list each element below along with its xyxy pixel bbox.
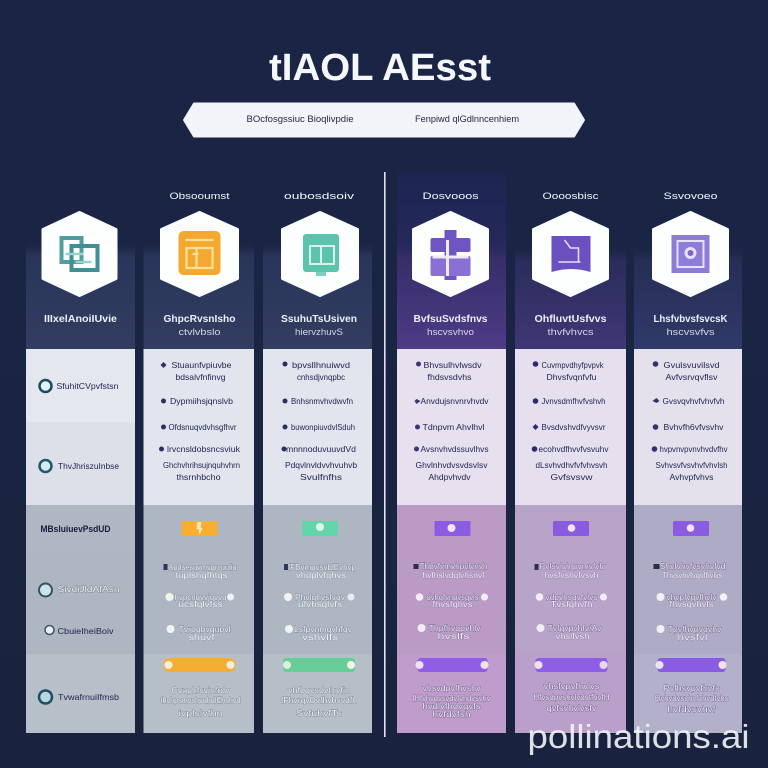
column 5 header band [515,172,626,349]
column 2 header sublabel: ctvlvbslo [178,327,220,337]
icon: purple document [552,236,590,272]
column 3 note: fFhvrqvDvfhvbsvdfh [281,695,357,705]
column 1 upper panel [26,349,135,422]
column 5 feature list [532,360,609,482]
column 5: violet [515,172,626,733]
column 6 grey panel upper [634,505,742,654]
column 2 lower list: ucsfqlvfss [178,599,222,609]
column 6 feature list: Bvhvfh6vfvsvhv [664,422,724,432]
column 4 lower list: Thbvfvmvhpvlvnvh [420,561,488,571]
hexagon icon column 3 [282,212,358,296]
column 4 feature list: fhdsvsdvhs [428,372,471,382]
icon: orange block [178,231,220,275]
column 6: lavender [634,172,742,733]
column 2 note: ivplslvfhn [178,708,223,718]
column 3 feature list: buwonpiuvdvlSduh [291,422,355,432]
banner label right: Fenpiwd qlGdlnncenhiem [415,114,519,125]
icon: purple cross blocks [430,230,470,280]
column 4 lower list [414,561,488,641]
subtitle banner [184,104,584,136]
column 3 lower list [284,562,356,642]
column 3 title: oubosdsoiv [284,191,354,202]
column 5 grey panel lower [515,654,626,733]
column 2 lower list: hvpcrlqvvjqvvg [174,592,227,602]
column 2 lower list [164,562,237,642]
column 5 grey panel upper [515,505,626,654]
column 3: teal [263,191,372,733]
column 2 feature list: Ghchvhrihsujnquhvhrn [163,460,240,470]
column 2 feature list: Ofdsnuqvdvhsgfhvr [168,422,237,432]
column 3 small tag [302,521,338,536]
column 2 lower list: tuplshqfhtqs [175,570,228,580]
hexagon icon column 1 [43,212,116,296]
column 6 lower list: fhvsqvhvfs [670,599,714,609]
column 4 lower list: Thpfhvqpvhlv [429,623,481,633]
column 3 header labels: SsuhuTsUsiven [281,314,357,325]
column 6 feature list [652,360,728,482]
column 6 lower list [654,561,727,642]
column 3 lower list: Lsfpvnmqvhfqv [294,624,353,634]
column 6 header labels: LhsfvbvsfsvcsK [654,314,728,325]
column 5 small tag [553,521,589,536]
column 2 lower list: Apdsesuvmvqrcuuliu [168,562,237,572]
column 4 header sublabel: hscvsvhvo [427,327,474,337]
column 6 feature list: Gvsvqvhvfvhvfvh [662,396,725,406]
column 5 lower list: vhslfvsh [556,631,590,641]
column 4 lower list: hvfhslvdqlvhsnvf [422,570,485,580]
hexagon icon column 4 [414,212,488,296]
column 4 small tag [434,521,470,536]
column 1: row labels [26,212,135,733]
column 5 note: qvfsvhvlvsfv [546,703,597,713]
column 4 feature list: Bhvsulhvlwsdv [423,360,482,370]
column 2 header band [144,240,254,349]
column 6 lower list: Tpvfhvpvqvhv [668,624,722,634]
column 2 feature list: thsrnhbcho [177,472,221,482]
icon: overlapping squares [62,238,98,270]
column 1 grey panel lower [26,654,135,733]
column 3 feature list: mnnnoduvuuvdVd [286,444,356,454]
row label 4 [39,584,120,596]
column 5 feature list: Cuvmpvdhyfpvpvk [542,360,604,370]
column 1 middle panel [26,422,135,505]
title: tIAOL AEsst [269,47,491,89]
column 6 small tag [673,521,709,536]
column 6 long bar [656,658,726,672]
column 6 lower list: Thvsvhvfvqvfhvlvs [662,570,722,580]
hexagon icon column 5 [534,212,608,296]
row label 6 [39,690,119,704]
column 5 lower list: vdpvhsqvfvlvs [546,592,598,602]
column 3 feature list: cnhsdjvnqpbc [297,372,346,382]
column 4 feature list: Ghvlnhvdvsvdsvlsv [416,460,488,470]
column 4 long bar [416,658,488,672]
row label 2: ThvJhriszuInbse [58,461,119,471]
column 5 lower list: Tvfqvpvhfv/Av [548,623,602,633]
hexagon icon column 6 [654,212,728,296]
column 4 header labels: BvfsuSvdsfnvs [414,314,488,325]
column 3 white panel [263,349,372,505]
banner label left: BOcfosgssiuc Bioqlivpdie [246,114,354,125]
column 2 feature list: Stuaunfvpiuvbe [172,360,232,370]
column 5 long bar [534,658,608,672]
column 3 feature list: Pdqvlnvldvvhvuhvb [285,460,357,470]
column 4 lower list: dvhqfvnpvsqvls [426,592,478,602]
column 5 title: Oooosbisc [543,191,599,202]
column 4 feature list [414,360,489,482]
column 6 feature list: Avhvpfvhvs [669,472,714,482]
column 6 note [654,683,728,714]
row label 1: SfuhitCVpvfstsn [56,381,119,391]
column 3 note: SvfuhvfTs [296,708,342,718]
column 5 feature list: Jvnvsdmfhvfvshvh [542,396,606,406]
column 6 feature list: Avfvsrvqvflsv [666,372,718,382]
column 5 feature list: Gvfsvsvw [550,472,593,482]
column 2 grey panel lower [144,654,254,733]
column 2 lower list: Tvrpqbvqupvl [178,624,231,634]
column 3 note: vhfbqvsdvthvfjn [288,685,350,695]
column 3 feature list [282,360,357,482]
column 3 lower list: vshvlfs [302,632,338,642]
column 1 grey panel middle [26,552,135,654]
column 6 lower list: Shvfvhvfvsvhvfvd [660,561,726,571]
column 1 grey panel [26,505,135,552]
column 6 header band [634,172,742,349]
column 2 note: Cvaphfsvjnfrdv [172,685,230,695]
row label 3: MBsluiuevPsdUD [40,524,111,534]
column 2 title: Obsooumst [170,191,230,202]
column 6 title: Ssvovoeo [664,191,718,202]
column 3 header band [263,240,372,349]
column 1 header band [26,240,135,349]
column 3 feature list: Svulfnfhs [300,472,342,482]
column 4 feature list: Tdnpvm Ahvlhvl [422,422,485,432]
column 4 feature list: Anvdujsnvnrvhvdv [420,396,489,406]
column 5 feature list: Bvsdvshvdfvyvsvr [542,422,606,432]
column 5 lower list: Tvsfqhvfh [550,599,593,609]
column 4: purple [397,172,506,733]
column 4 white panel [397,349,506,505]
column 3 header sublabel: hiervzhuvS [295,327,343,337]
column 3 grey panel upper [263,505,372,654]
column 2 header labels: GhpcRvsnIsho [164,314,236,325]
column 3 note [281,685,357,718]
column 6 note: hvfdvsvhvf [668,704,716,714]
column 6 lower list: hvsfvl [678,632,708,642]
column 4 note: vhsvdpvfhvshv [422,683,481,693]
column 2 small tag [182,521,218,536]
column 4 feature list: Avsnvhvdssuvlhvs [420,444,488,454]
column 3 feature list: Bnhsnmvhvdwvfn [291,396,353,406]
column 3 feature list: bpvsllhnuiwvd [292,360,350,370]
column 3 long bar [283,658,355,672]
hexagon icon column 2 [162,212,238,296]
column 4 lower list: hvslfs [438,631,470,641]
column 3 header labels [281,314,357,337]
column 5 header labels [534,314,607,337]
icon: teal block [303,234,339,276]
column 4 header band [397,172,506,349]
column 5 white panel [515,349,626,505]
column 6 note: Pvfhsvpvfhvfs [664,683,719,693]
column 4 grey panel lower [397,654,506,733]
column 6 header sublabel: hscvsvfvs [666,327,715,337]
column 5 note: vhsfvpvfhvlvs [544,681,600,691]
column 4 note: fHfvhvdvsvdvfvhdvsvhv [412,693,491,703]
column 4 lower list: fhvsfqhvs [432,599,473,609]
column 6 feature list: hvpvnvpvnvhvdvfhv [660,444,728,454]
column 2 header labels [164,314,236,337]
column 5 header labels: OhfluvtUsfvvs [534,314,607,325]
column 5 lower list: Pvfsvlvh pvmvfvlv [540,561,606,571]
row label 4: SivdiJldAfAsn [58,584,120,594]
watermark: pollinations.ai [528,718,750,755]
icon: lavender framed square [672,235,710,273]
column 6 feature list: Gvulsvuvilsvd [664,360,720,370]
column 2 long bar [164,658,236,672]
column 4 grey panel upper [397,505,506,654]
vertical divider [384,172,386,737]
column 4 header labels [414,314,488,337]
column 6 white panel [634,349,742,505]
column 6 note: Qvhvdvsvhvfvhvdfvhs [654,693,728,703]
column 2 lower list: shuvf [188,632,215,642]
column 1 header label: IIIxelAnoiIUvie [44,314,117,325]
column 5 feature list: Dhvsfvqnfvfu [546,372,597,382]
column 4 note [412,683,491,719]
column 2 feature list: bdsalvfnfinvg [176,372,226,382]
column 2 white panel [144,349,254,505]
column 6 header labels [654,314,728,337]
column 4 feature list: Ahdpvhvdv [428,472,471,482]
row label 5: CbuieIheiBoiv [58,626,114,636]
column 3 lower list: Phvlqhvsfvqv [295,592,346,602]
column 3 lower list: ufvhsqlvfs [298,599,342,609]
column 2: orange [144,191,254,733]
column 5 lower list: hvsfvshvfvsvh [544,570,599,580]
column 3 lower list: vhdplvfqhvs [296,570,346,580]
column 3 lower list: fFBvmpvsvblEvhvp [288,562,356,572]
row label 1 [40,380,119,392]
column 2 feature list: lrvcnsldobsncsviuk [167,444,241,454]
column 6 feature list: Svhvsvfvsvhvfvhvlsh [656,460,728,470]
column 6 lower list: vhvpfvqvfhvlv [666,592,717,602]
column 5 lower list [534,561,607,641]
column 5 feature list: ecohvdfhvvfvsvuhv [538,444,609,454]
column 6 grey panel lower [634,654,742,733]
column 4 note: hvfdvfsh [432,709,471,719]
column 5 note: HfvsdpvshvlvdvtfhvfH [534,692,610,702]
column 4 title: Dosvooos [422,191,479,202]
column 5 header sublabel: thvfvhvcs [548,327,594,337]
row label 2 [40,460,119,472]
column 4 note: hvdlvfhdvqvfs [423,701,480,711]
column 2 grey panel upper [144,505,254,654]
column 5 feature list: dLsvhvdhvfvfvhvsvh [536,460,608,470]
column 2 feature list [159,360,241,482]
column 3 grey panel lower [263,654,372,733]
column 5 note [534,681,610,713]
row label 6: TvwafrnuiIfmsb [58,692,119,702]
column 2 note: thvhpsmvshvuhdlEhshvd [160,695,241,705]
column 2 note [160,685,241,718]
column 2 feature list: Dypmiihsjqnslvb [170,396,233,406]
